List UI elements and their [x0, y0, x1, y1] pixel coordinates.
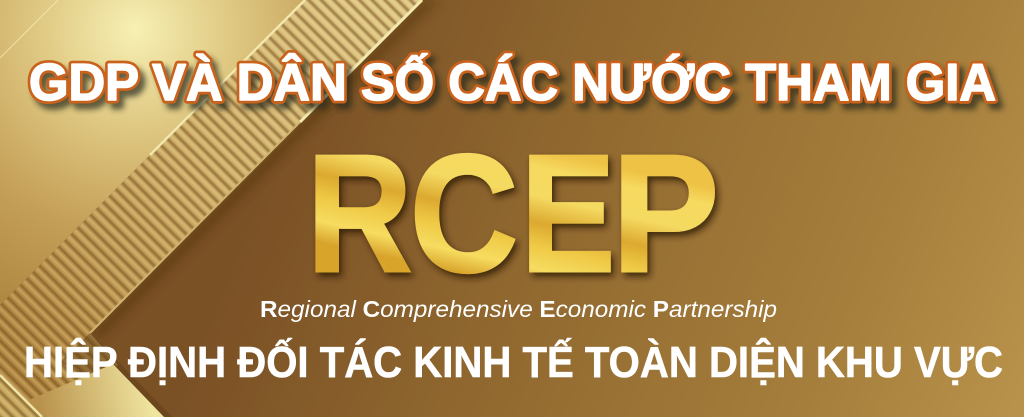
panel: gold diagonal decoration: [0, 0, 440, 417]
title: GDP VÀ DÂN SỐ CÁC NƯỚC THAM GIA: [29, 53, 996, 112]
band lower highlight edge: [300, 0, 422, 122]
RCEP logotype: [307, 121, 719, 307]
title: GDP VÀ DÂN SỐ CÁC NƯỚC THAM GIA: [29, 53, 996, 112]
RCEP logotype: C: [410, 121, 518, 307]
subtitle: English name: Regional Comprehensive Economic Partnership: [260, 296, 777, 322]
ribbed diagonal band: [0, 0, 423, 417]
RCEP logotype: R: [307, 121, 412, 307]
RCEP logotype: P: [612, 121, 719, 307]
lower gold plate: [29, 364, 164, 417]
gold upper-left plate: [0, 0, 305, 305]
lower dark fold: [60, 333, 172, 417]
bottom-left ribbed corner: [0, 375, 42, 417]
band upper highlight edge: [150, 0, 305, 155]
thin highlight line: [0, 0, 58, 58]
RCEP logotype: E: [521, 121, 615, 307]
shadow under band: [90, 0, 440, 340]
corner highlight edge: [0, 375, 42, 417]
